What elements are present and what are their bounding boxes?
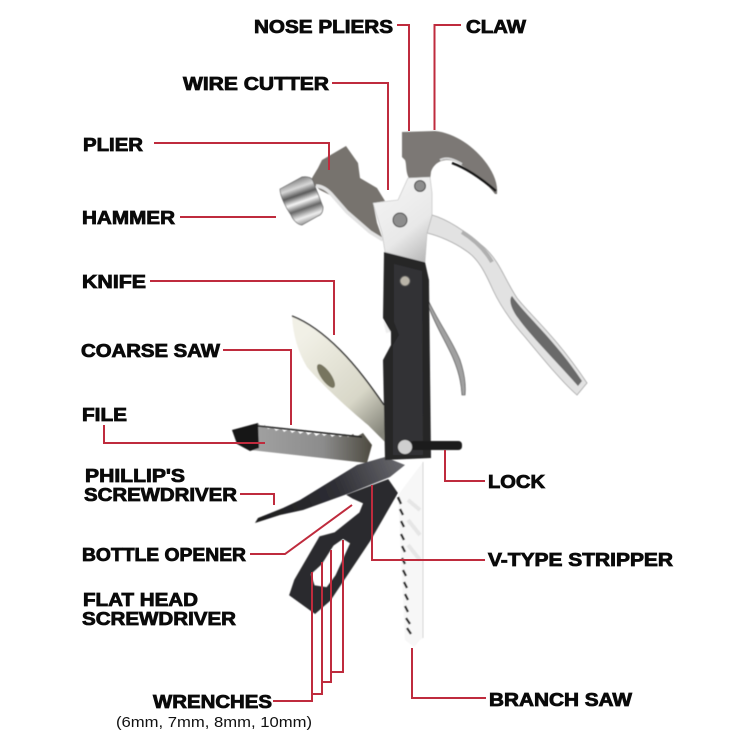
label: branch saw [412,648,632,710]
label: flat head screwdriver: SCREWDRIVER [82,609,236,629]
label: bottle opener [82,505,352,565]
label: wrenches: WRENCHES [153,692,272,712]
icon: black handle [383,252,431,460]
label: phillip's screwdriver: SCREWDRIVER [84,485,237,505]
icon: file and coarse saw [232,423,372,463]
label: claw [434,17,526,130]
icon: hammer and plier head [280,146,385,240]
icon: silver plate [373,177,432,262]
icon: phillips screwdriver [255,457,405,523]
label: wire cutter: WIRE CUTTER [183,74,329,94]
icon: pliers handle [427,215,587,395]
icon: claw [402,131,497,194]
label: knife [82,272,334,335]
label: wrenches: (6mm, 7mm, 8mm, 10mm) [116,714,312,731]
icon: wrenches and bottle opener [290,480,397,613]
label: claw: CLAW [466,17,526,37]
label: plier [83,135,329,170]
label: nose pliers [254,17,409,131]
label: wire cutter [183,74,388,190]
icon: knife blade [292,316,385,442]
label: lock [445,450,545,492]
label: phillip's screwdriver [84,466,274,505]
label: file: FILE [82,405,127,425]
icon: spring wire [428,300,465,395]
label: phillip's screwdriver: PHILLIP'S [85,466,185,486]
label: knife: KNIFE [82,272,146,292]
label: wrenches [116,540,343,731]
tool illustration [232,131,587,647]
label: lock: LOCK [488,472,545,492]
label: bottle opener: BOTTLE OPENER [82,545,246,565]
label: flat head screwdriver: FLAT HEAD [83,590,198,610]
label: flat head screwdriver [82,590,236,629]
label: coarse saw: COARSE SAW [81,341,220,361]
icon: branch saw [398,462,423,647]
label: branch saw: BRANCH SAW [489,690,632,710]
label: v-type stripper [372,485,673,570]
label: hammer: HAMMER [82,208,175,228]
icon: lock [398,440,462,454]
label: v-type stripper: V-TYPE STRIPPER [488,550,673,570]
label: coarse saw [81,341,291,425]
label: nose pliers: NOSE PLIERS [254,17,393,37]
label: plier: PLIER [83,135,143,155]
label: file [82,405,265,443]
